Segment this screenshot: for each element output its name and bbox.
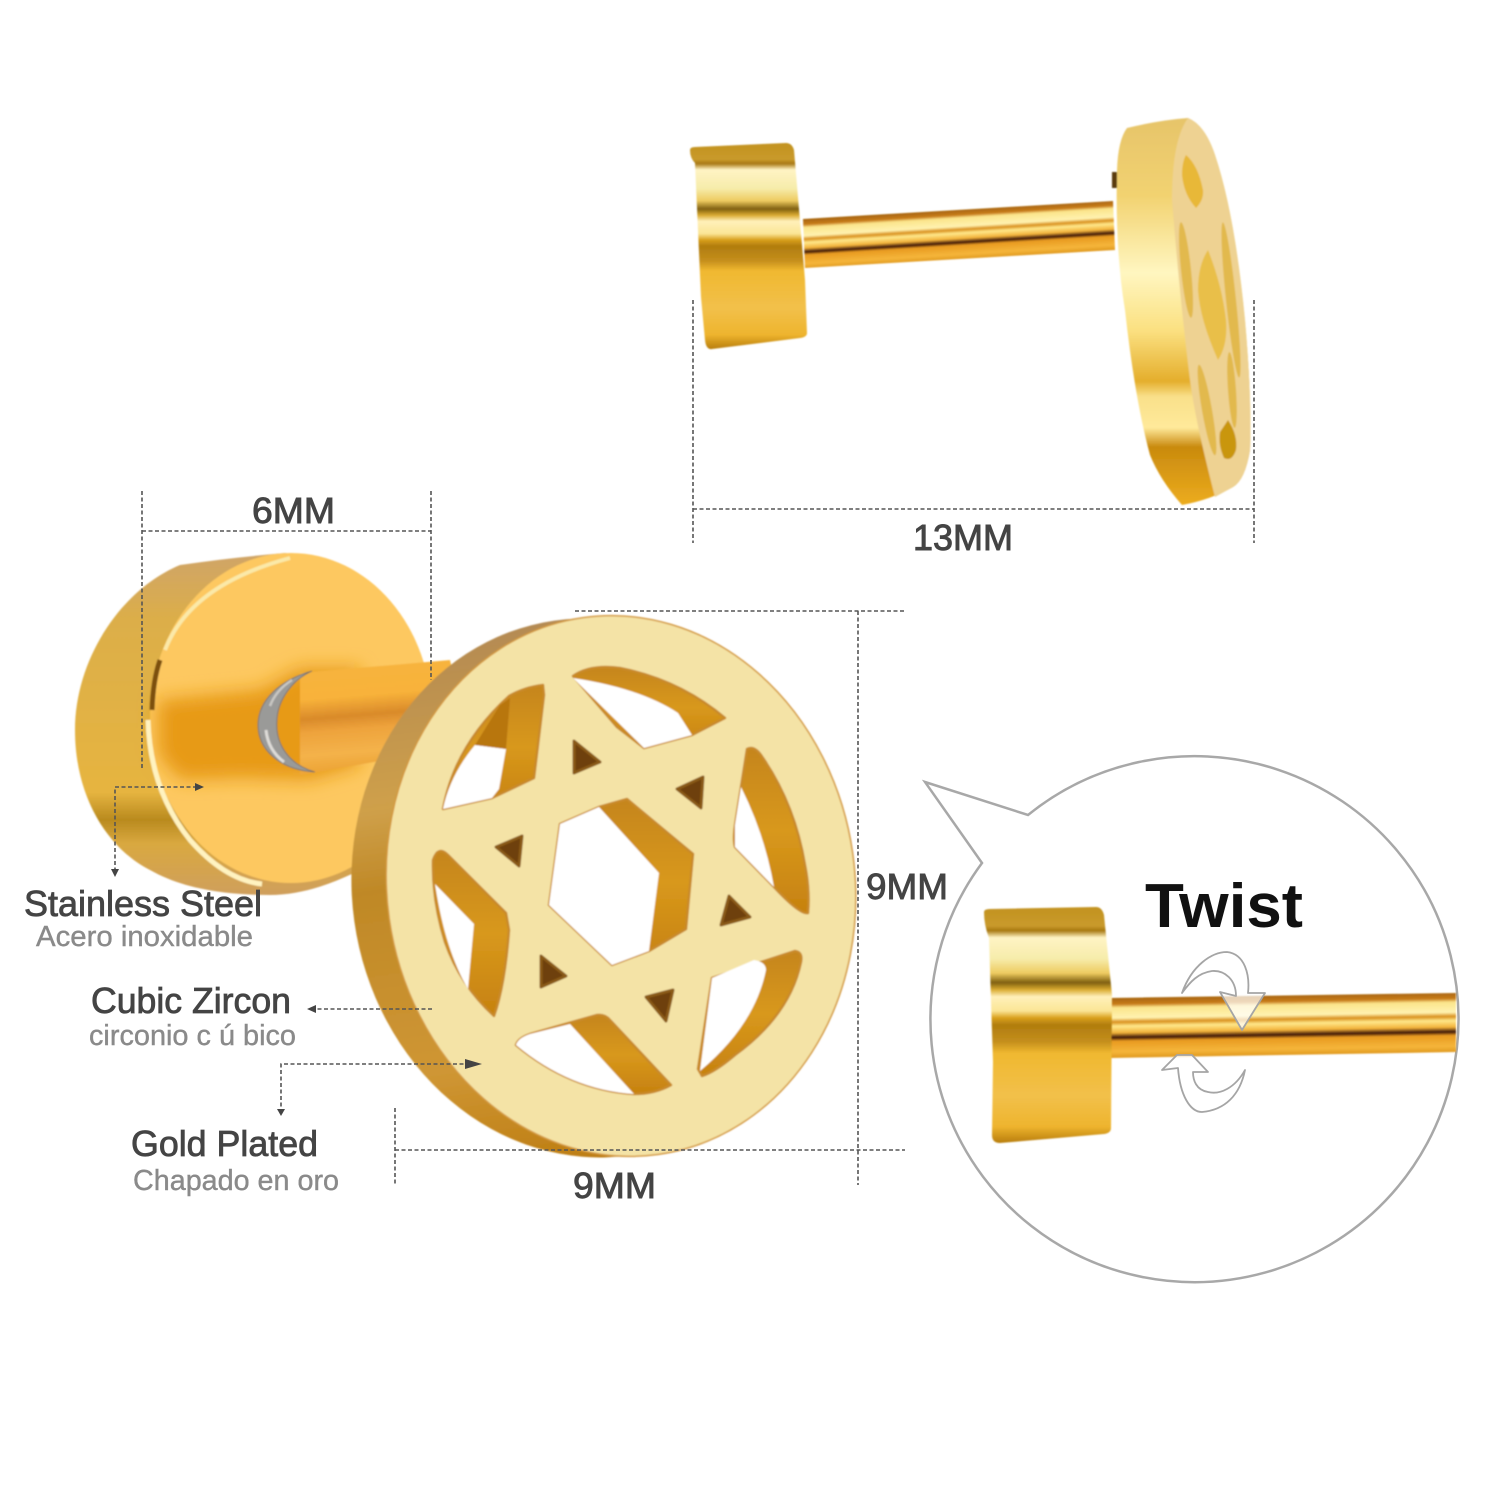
dimension: 6MM xyxy=(142,490,431,770)
twist callout bubble xyxy=(925,756,1458,1282)
earring front view xyxy=(75,553,890,1189)
label: stainless steel: Acero inoxidable xyxy=(36,921,253,953)
dimension: 9MM height: 9MM xyxy=(866,866,948,907)
back disc xyxy=(75,553,432,895)
star disc face with cut-outs xyxy=(352,585,890,1187)
shaft xyxy=(1110,993,1456,1058)
dimension: 9MM height xyxy=(395,611,948,1185)
dimension: 13MM xyxy=(693,300,1254,558)
bubble outline xyxy=(925,756,1458,1282)
dimension: 13MM: 13MM xyxy=(913,517,1013,558)
label: gold plated: Chapado en oro xyxy=(133,1165,339,1197)
label: stainless steel xyxy=(24,783,262,953)
dimension: 6MM: 6MM xyxy=(252,490,335,531)
label: cubic zircon: circonio c ú bico xyxy=(89,1020,296,1052)
back cap xyxy=(984,907,1112,1143)
shaft xyxy=(300,660,470,775)
label: stainless steel: Stainless Steel xyxy=(24,883,262,924)
icon: twist arrows xyxy=(1162,952,1265,1112)
label: gold plated xyxy=(131,1059,482,1197)
shaft xyxy=(803,201,1115,268)
cut-outs xyxy=(433,667,809,1094)
label: cubic zircon: Cubic Zircon xyxy=(91,980,291,1021)
back cap xyxy=(690,143,807,349)
silver ring xyxy=(258,671,315,772)
label: cubic zircon xyxy=(89,980,432,1052)
heading: twist: Twist xyxy=(1145,872,1303,941)
label: gold plated: Gold Plated xyxy=(131,1123,318,1164)
dimension: 9MM width: 9MM xyxy=(573,1165,656,1206)
earring side view xyxy=(690,118,1250,505)
star disc rim xyxy=(317,587,867,1189)
star disc, side view xyxy=(1112,118,1250,505)
